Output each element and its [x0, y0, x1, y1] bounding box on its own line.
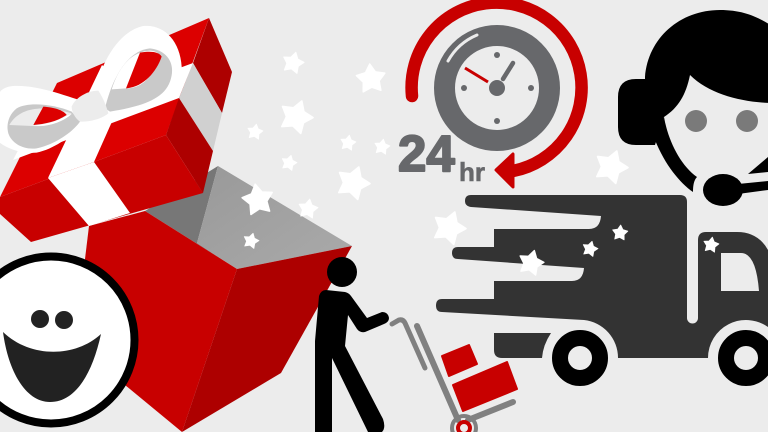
bow left loop	[0, 86, 90, 153]
24 hr label: 24	[398, 125, 455, 182]
wheel	[452, 416, 476, 432]
clock face	[444, 36, 550, 140]
face outline	[655, 117, 697, 192]
truck stars	[516, 224, 720, 276]
box interior	[145, 166, 352, 269]
person pushing trolley	[315, 257, 389, 432]
wheels	[560, 338, 766, 378]
bow knot	[72, 91, 108, 122]
red arrow	[412, 3, 582, 171]
boxes	[442, 345, 517, 411]
customer service agent	[618, 10, 768, 206]
hand truck	[392, 320, 517, 432]
smiley face	[0, 256, 134, 424]
box right face	[182, 246, 352, 432]
stars	[240, 50, 632, 249]
ribbon bow	[0, 26, 182, 153]
clock with 24hr arrow	[398, 3, 582, 187]
ear cup and hair	[618, 10, 768, 145]
clock with 24hr arrow: hr	[459, 157, 485, 187]
microphone	[703, 174, 768, 206]
gift lid with ribbon	[0, 18, 232, 242]
box front face	[85, 211, 237, 432]
bow right loop	[95, 26, 182, 113]
delivery truck	[436, 195, 768, 378]
cab window	[721, 253, 759, 291]
open gift box	[85, 166, 352, 432]
